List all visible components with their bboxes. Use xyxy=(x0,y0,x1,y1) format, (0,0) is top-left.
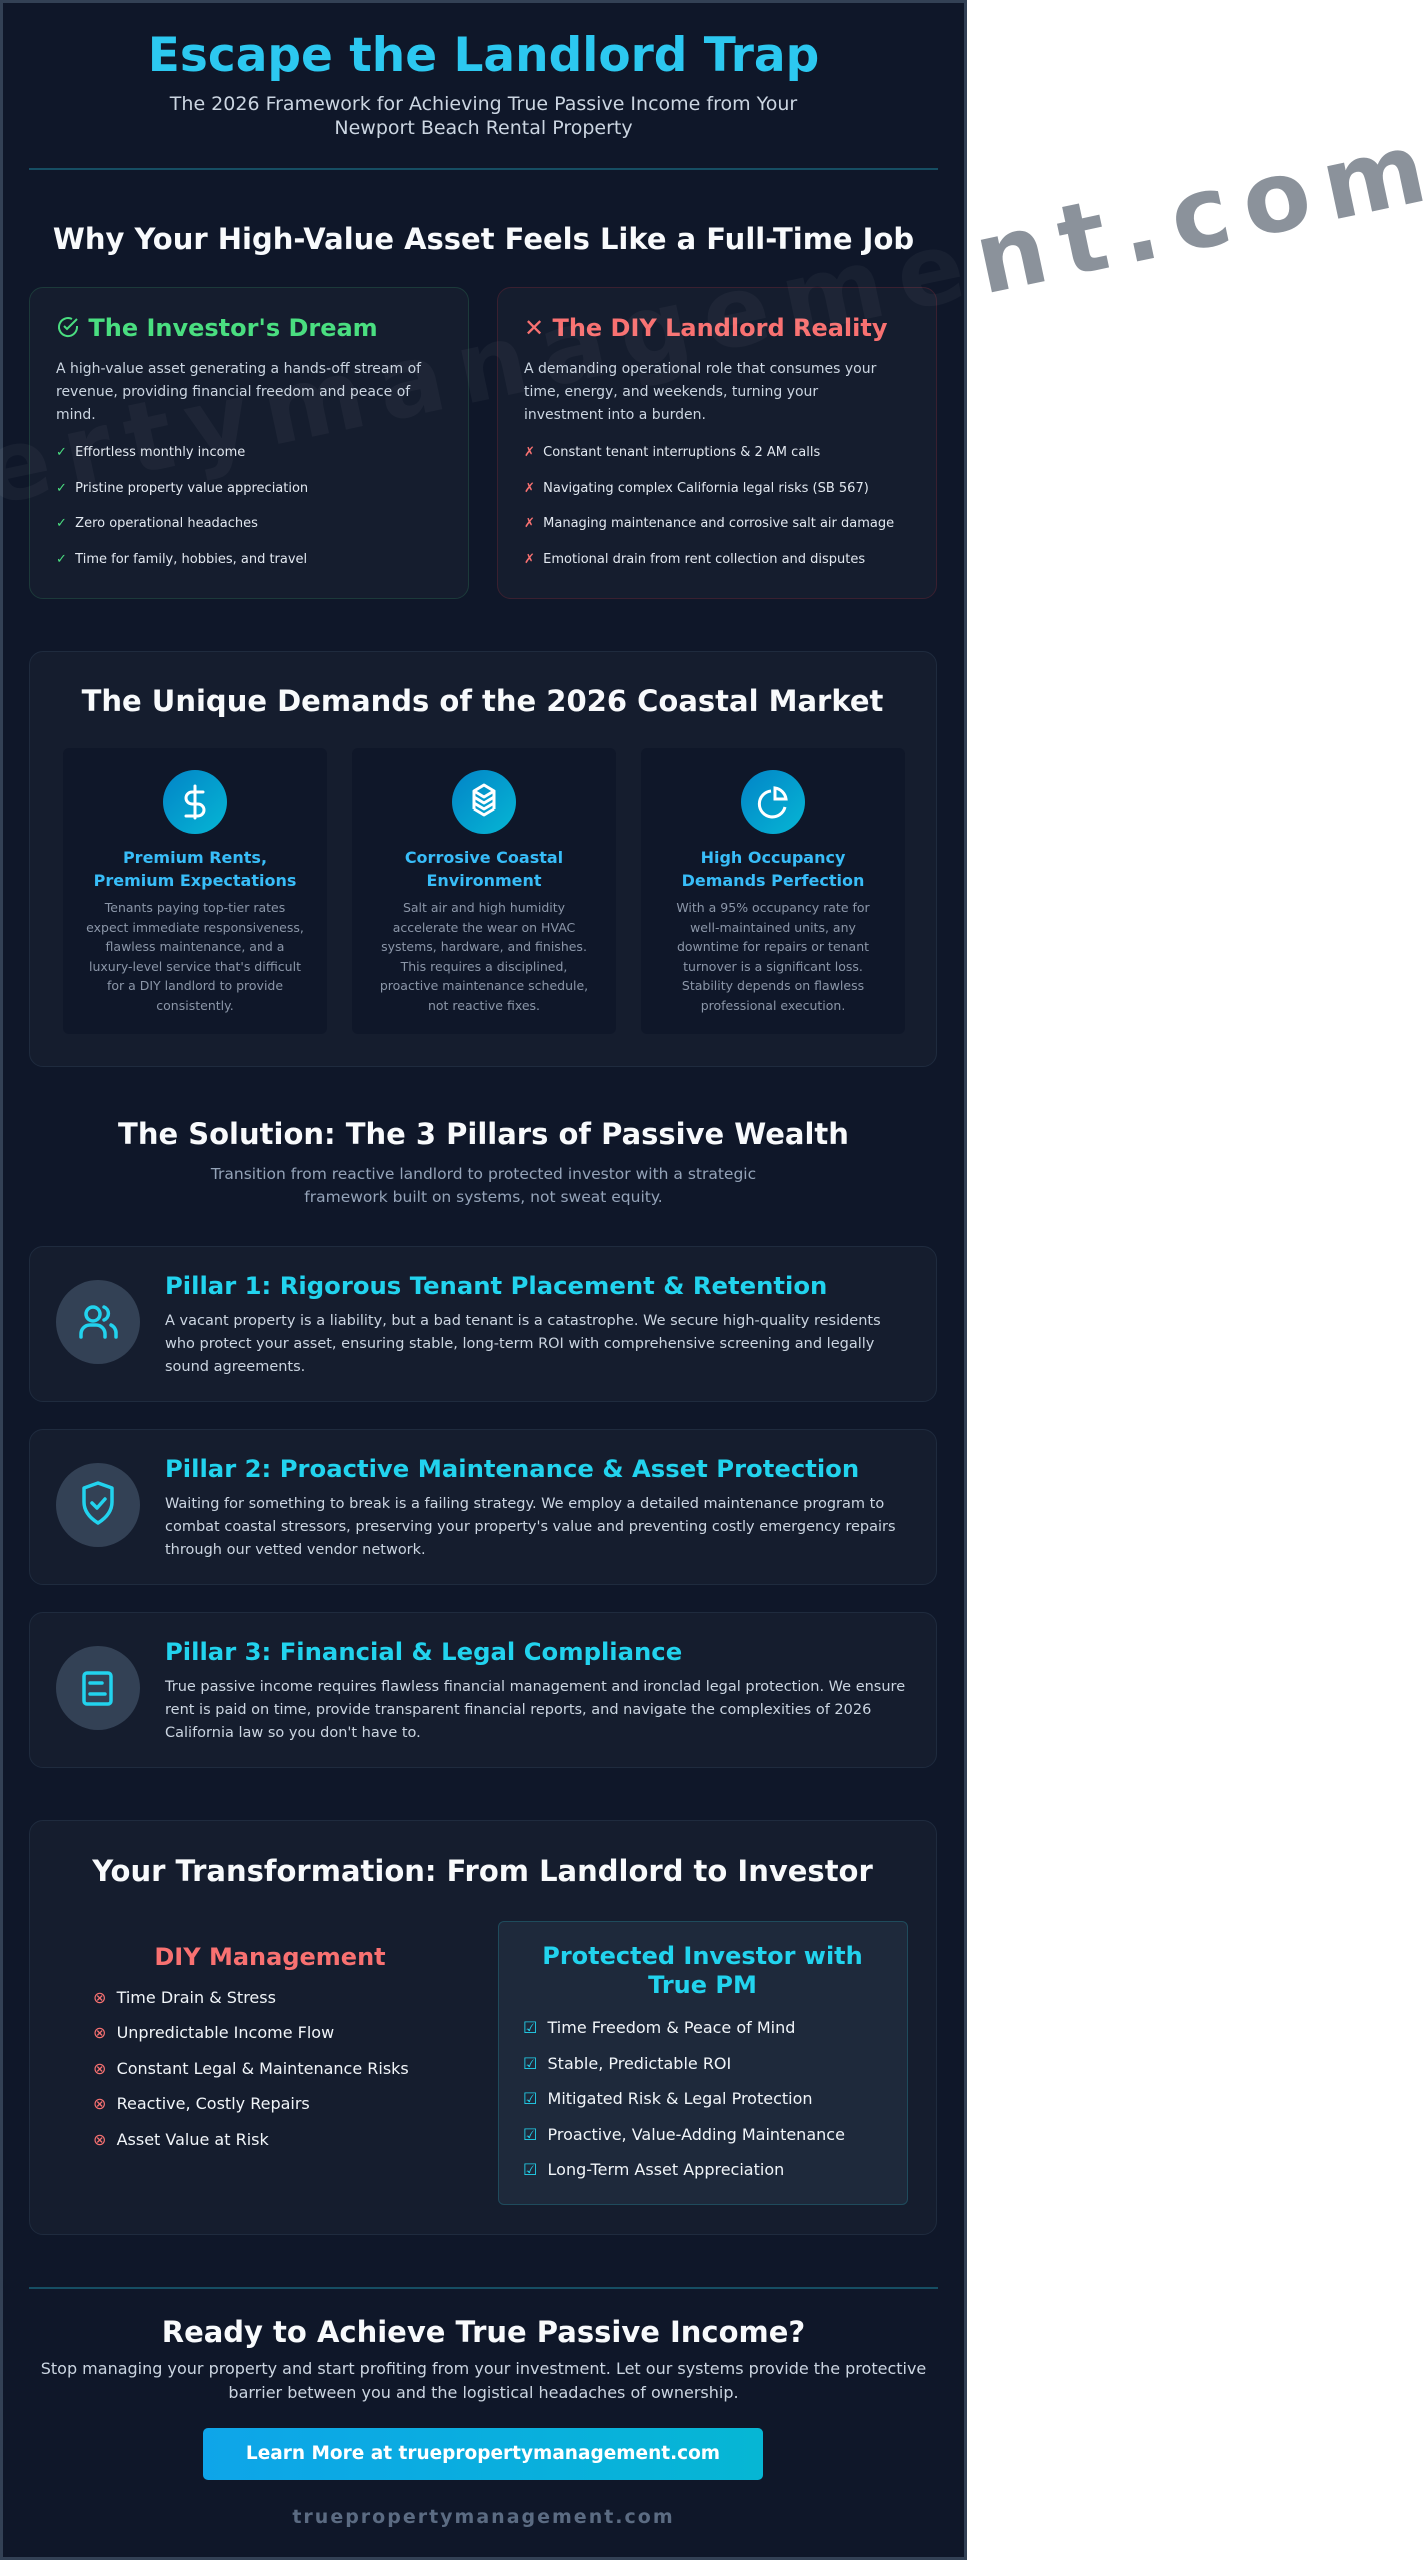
card: occupancy: With a 95% occupancy rate for well-maintained units, any downtime for repairs or tenant turnover is a significant loss. Stability depends on flawless professional execution. xyxy=(676,900,870,1012)
heading: why: Why Your High-Value Asset Feels Like a Full-Time Job xyxy=(53,222,914,256)
card: premium rents: Premium Rents, xyxy=(123,848,267,867)
list: dream bullets: ✓ Zero operational headaches xyxy=(56,516,258,531)
column: protected investor: ☑ Time Freedom & Peace of Mind xyxy=(523,2018,795,2037)
card: corrosive xyxy=(352,748,616,1034)
card: pillar 2 xyxy=(29,1429,937,1585)
card: premium rents: Premium Expectations xyxy=(94,871,296,890)
main panel xyxy=(0,0,967,2560)
column: DIY management: ⊗ Unpredictable Income Flow xyxy=(93,2023,334,2042)
heading: transformation: Your Transformation: From Landlord to Investor xyxy=(92,1854,873,1888)
card: corrosive: Environment xyxy=(426,871,542,890)
panel: transformation xyxy=(29,1820,937,2235)
card: pillar 2: Pillar 2: Proactive Maintenance & Asset Protection xyxy=(165,1454,859,1483)
card: corrosive: Salt air and high humidity accelerate the wear on HVAC systems, hardware, and finishes. This requires a disciplined, proactive maintenance schedule, not reactive fixes. xyxy=(380,900,588,1012)
card: pillar 1: A vacant property is a liability, but a bad tenant is a catastrophe. We secure high-quality residents who protect your asset, ensuring stable, long-term ROI with comprehensive screening and legally sound agreements. xyxy=(165,1313,881,1375)
list: dream bullets xyxy=(56,445,308,567)
footer url: truepropertymanagement.com xyxy=(292,2506,675,2528)
card: occupancy: High Occupancy xyxy=(701,848,845,867)
list: reality bullets: ✗ Emotional drain from rent collection and disputes xyxy=(524,552,865,567)
column: protected investor: ☑ Stable, Predictable ROI xyxy=(523,2054,731,2073)
panel: investor's dream xyxy=(29,287,469,599)
card: pillar 1: Pillar 1: Rigorous Tenant Placement & Retention xyxy=(165,1271,827,1300)
card: pillar 3: True passive income requires flawless financial management and ironclad legal protection. We ensure rent is paid on time, provide transparent financial reports, and navigate the complexities of 2026 California law so you don't have to. xyxy=(165,1679,905,1741)
card: premium rents xyxy=(63,748,327,1034)
button: learn more xyxy=(203,2428,763,2480)
list: reality bullets: ✗ Constant tenant interruptions & 2 AM calls xyxy=(524,445,820,460)
column: DIY management: ⊗ Reactive, Costly Repairs xyxy=(93,2094,310,2113)
icon: document xyxy=(56,1646,140,1730)
panel: DIY reality xyxy=(497,287,937,599)
column: protected investor: Protected Investor with xyxy=(542,1942,863,1970)
heading: coastal: The Unique Demands of the 2026 Coastal Market xyxy=(82,684,883,718)
card: occupancy: Demands Perfection xyxy=(682,871,864,890)
list: reality bullets: ✗ Navigating complex California legal risks (SB 567) xyxy=(524,481,869,496)
text: solution subtitle: Transition from reactive landlord to protected investor with a strategic framework built on systems, not sweat equity. xyxy=(211,1165,756,1206)
card: pillar 3 xyxy=(29,1612,937,1768)
list: dream bullets: ✓ Pristine property value appreciation xyxy=(56,481,308,496)
title: Escape the Landlord Trap xyxy=(148,28,819,83)
icon: pie chart xyxy=(741,770,805,834)
panel: coastal market xyxy=(29,651,937,1067)
card: corrosive: Corrosive Coastal xyxy=(405,848,563,867)
column: DIY management: ⊗ Time Drain & Stress xyxy=(93,1988,276,2007)
icon: shield xyxy=(56,1463,140,1547)
card: premium rents: Tenants paying top-tier rates expect immediate responsiveness, flawless maintenance, and a luxury-level service that's difficult for a DIY landlord to provide consistently. xyxy=(86,900,304,1012)
column: DIY management: ⊗ Constant Legal & Maintenance Risks xyxy=(93,2059,409,2078)
list: reality bullets: ✗ Managing maintenance and corrosive salt air damage xyxy=(524,516,894,531)
button: learn more: Learn More at truepropertymanagement.com xyxy=(246,2443,720,2464)
column: protected investor: True PM xyxy=(648,1971,757,1999)
text: reality description: A demanding operational role that consumes your time, energy, and weekends, turning your investment into a burden. xyxy=(524,361,876,423)
list: dream bullets: ✓ Effortless monthly income xyxy=(56,445,245,460)
column: DIY management: DIY Management xyxy=(154,1943,386,1971)
subtitle: The 2026 Framework for Achieving True Passive Income from Your Newport Beach Rental Property xyxy=(170,93,797,139)
text: dream description: A high-value asset generating a hands-off stream of revenue, providing financial freedom and peace of mind. xyxy=(56,361,421,423)
icon: layers xyxy=(452,770,516,834)
column: DIY management xyxy=(93,1943,409,2149)
heading: solution: The Solution: The 3 Pillars of Passive Wealth xyxy=(118,1117,849,1151)
list: dream bullets: ✓ Time for family, hobbies, and travel xyxy=(56,552,307,567)
column: protected investor: ☑ Long-Term Asset Appreciation xyxy=(523,2160,784,2179)
column: DIY management: ⊗ Asset Value at Risk xyxy=(93,2130,269,2149)
column: protected investor: ☑ Mitigated Risk & Legal Protection xyxy=(523,2089,813,2108)
icon: users xyxy=(56,1280,140,1364)
watermark xyxy=(3,150,1423,500)
card: pillar 3: Pillar 3: Financial & Legal Compliance xyxy=(165,1637,682,1666)
column: protected investor xyxy=(498,1921,908,2205)
column: protected investor: ☑ Proactive, Value-Adding Maintenance xyxy=(523,2125,845,2144)
icon: dollar xyxy=(163,770,227,834)
heading: dream: The Investor's Dream xyxy=(88,314,378,342)
heading: reality: ✕ The DIY Landlord Reality xyxy=(524,314,888,342)
text: CTA: Stop managing your property and start profiting from your investment. Let our systems provide the protective barrier between you and the logistical headaches of ownership. xyxy=(41,2359,926,2402)
list: reality bullets xyxy=(524,445,894,567)
card: pillar 2: Waiting for something to break is a failing strategy. We employ a detailed maintenance program to combat coastal stressors, preserving your property's value and preventing costly emergency repairs through our vetted vendor network. xyxy=(165,1496,896,1558)
card: occupancy xyxy=(641,748,905,1034)
card: pillar 1 xyxy=(29,1246,937,1402)
heading: CTA: Ready to Achieve True Passive Income? xyxy=(162,2315,805,2349)
